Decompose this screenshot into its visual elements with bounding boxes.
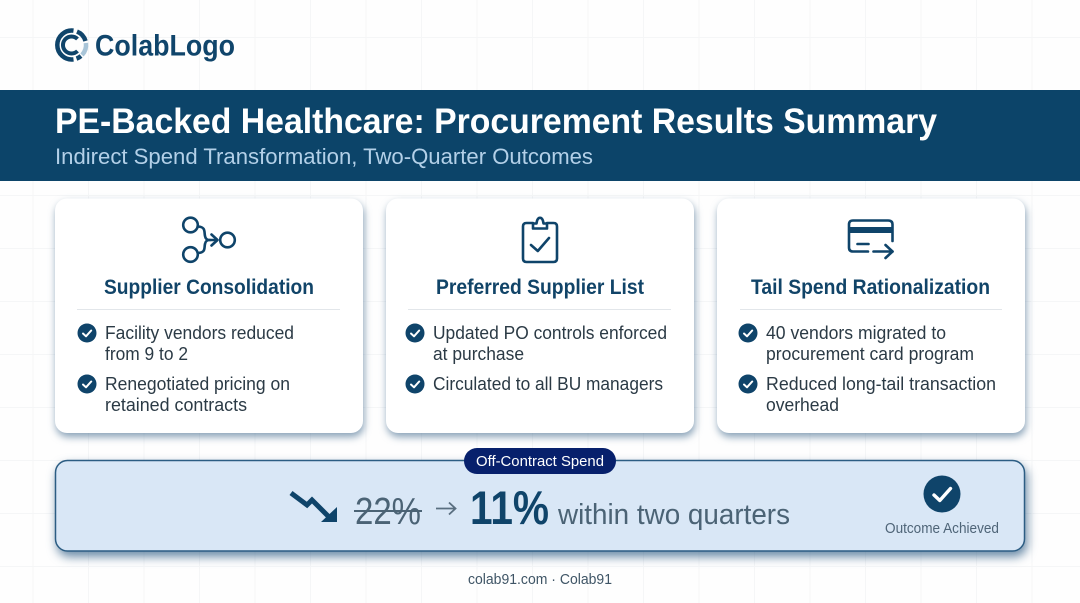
logo <box>57 30 235 62</box>
new value: 11% <box>470 481 549 534</box>
bullet list: from 9 to 2 <box>105 344 188 364</box>
bullet list: Circulated to all BU managers <box>433 374 663 394</box>
old value: 22% <box>355 491 421 533</box>
subtitle: Indirect Spend Transformation, Two-Quarter Outcomes <box>55 144 593 169</box>
outcome label: Outcome Achieved <box>885 521 999 537</box>
bullet list: retained contracts <box>105 395 247 415</box>
panel: off-contract spend outcome <box>56 448 1024 551</box>
bullet list: overhead <box>766 395 839 415</box>
heading: Preferred Supplier List <box>436 276 644 299</box>
footer: colab91.com · Colab91 <box>468 572 612 588</box>
bullet list: Updated PO controls enforced <box>433 323 667 343</box>
header banner <box>0 90 1080 181</box>
logo wordmark: ColabLogo <box>95 30 235 62</box>
bullet list: Facility vendors reduced <box>105 323 294 343</box>
icon: arrow <box>436 502 456 514</box>
icon: logo mark <box>57 30 86 59</box>
heading: Tail Spend Rationalization <box>751 276 990 299</box>
bullet list: at purchase <box>433 344 524 364</box>
bullet list: procurement card program <box>766 344 974 364</box>
bullet list <box>738 323 996 415</box>
icon: outcome check <box>924 476 960 512</box>
panel: tail spend rationalization <box>717 198 1025 433</box>
panel: supplier consolidation <box>55 198 363 433</box>
icon: payment card with arrow <box>849 220 892 258</box>
icon: downward trend arrow <box>291 493 337 522</box>
bullet list: 40 vendors migrated to <box>766 323 946 343</box>
heading: Supplier Consolidation <box>104 276 314 299</box>
bullet list: Reduced long-tail transaction <box>766 374 996 394</box>
value caption: within two quarters <box>557 499 790 531</box>
bullet list <box>78 323 294 415</box>
icon: clipboard check <box>523 218 557 262</box>
icon: merging nodes <box>183 218 235 262</box>
badge: off-contract spend <box>464 448 616 474</box>
badge: off-contract spend: Off-Contract Spend <box>476 453 604 470</box>
title: PE-Backed Healthcare: Procurement Results Summary <box>55 102 938 141</box>
bullet list: Renegotiated pricing on <box>105 374 290 394</box>
panel: preferred supplier list <box>386 198 694 433</box>
bullet list <box>406 323 667 394</box>
